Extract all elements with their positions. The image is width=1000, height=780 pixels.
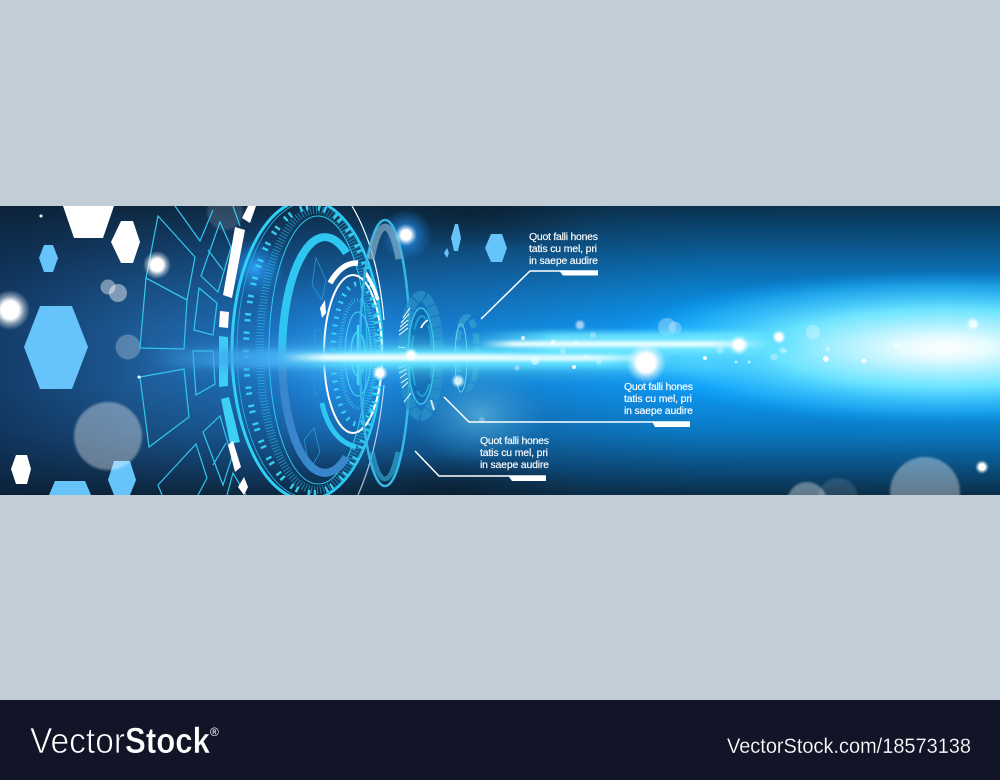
logo: VectorStock (30, 720, 219, 761)
image id: VectorStock.com/18573138 (727, 735, 971, 758)
logo: VectorStock: Vector (30, 720, 125, 761)
inner rings (333, 284, 381, 424)
callout: top: in saepe audire (529, 255, 598, 267)
logo: VectorStock: ® (210, 725, 219, 739)
banner (0, 206, 1000, 495)
callout: middle (444, 381, 693, 427)
footer bar (0, 700, 1000, 780)
bokeh circles (72, 206, 962, 495)
callout: middle: in saepe audire (624, 405, 693, 417)
sparkle particles (479, 332, 961, 423)
callout: bottom: tatis cu mel, pri (480, 447, 548, 459)
banner background gradient (0, 206, 1000, 495)
callout: middle: Quot falli hones (624, 381, 693, 393)
callout: top (481, 231, 598, 319)
white ring (320, 263, 382, 433)
logo: VectorStock: Stock (125, 720, 211, 761)
main tech disc (232, 200, 384, 500)
tech panels (138, 206, 246, 495)
callout: bottom: Quot falli hones (480, 435, 549, 447)
blue lens glows (228, 210, 430, 448)
segmented bars (219, 206, 256, 495)
callout: bottom: in saepe audire (480, 459, 549, 471)
callout: bottom (415, 435, 549, 481)
medium tech disc (398, 296, 439, 416)
white radial ticks (398, 308, 411, 402)
callout: top: Quot falli hones (529, 231, 598, 243)
white lens flares (0, 214, 989, 474)
callout: top: tatis cu mel, pri (529, 243, 597, 255)
outer rings (232, 200, 384, 500)
callout: middle: tatis cu mel, pri (624, 393, 692, 405)
small tech disc (451, 317, 477, 392)
thin outer ring (360, 220, 410, 486)
blue ring (282, 237, 356, 473)
light beams (140, 332, 810, 372)
hexagons (11, 206, 507, 495)
faint squares (304, 258, 326, 470)
